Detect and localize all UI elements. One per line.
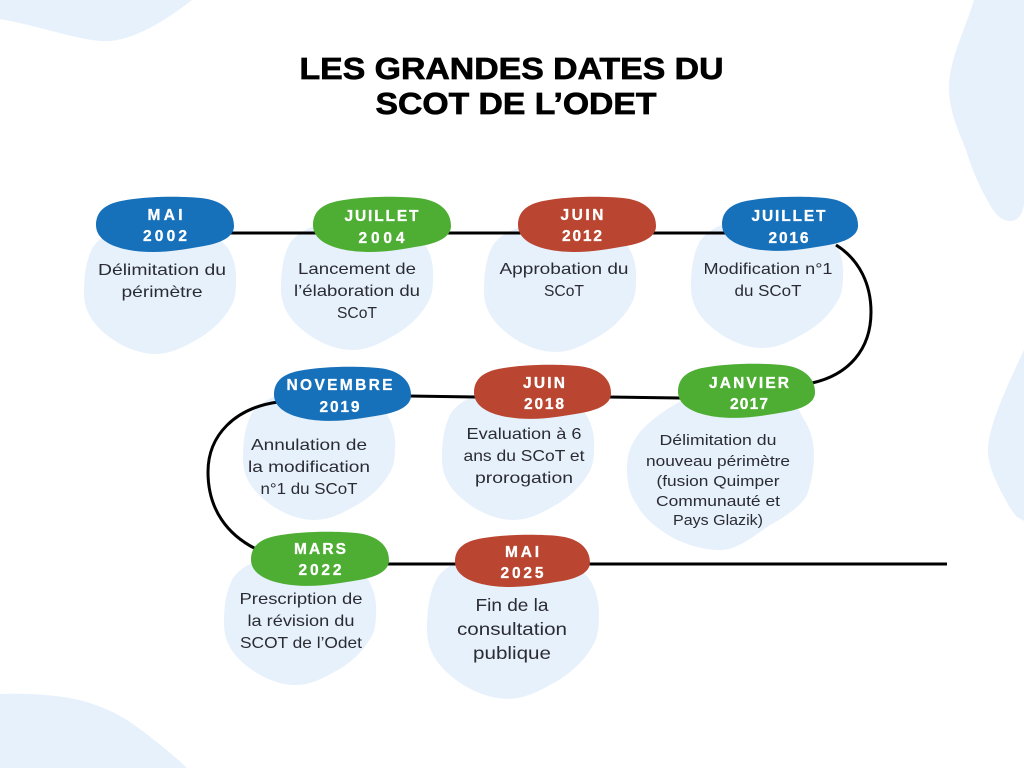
date label: juillet 2004: JUILLET	[344, 208, 419, 225]
event: janvier 2017	[646, 364, 815, 529]
description: juillet 2004	[294, 261, 420, 322]
event: juin 2018	[464, 365, 611, 487]
date label: mars 2022: 2022	[298, 562, 342, 579]
description: mars 2022	[240, 591, 363, 652]
description: mai 2025: Fin de la	[476, 595, 549, 615]
description bubbles	[84, 219, 843, 699]
background shape: top left	[0, 0, 192, 41]
description: janvier 2017: Délimitation du	[660, 433, 776, 449]
date badge: juin 2018	[474, 365, 611, 419]
date label: juillet 2004	[344, 208, 419, 247]
description: juin 2018: prorogation	[475, 470, 573, 487]
date label: mai 2002	[143, 207, 187, 245]
description: novembre 2019: Annulation de	[251, 437, 367, 454]
description: mai 2025: publique	[473, 643, 551, 663]
date label: juin 2012: JUIN	[560, 207, 604, 224]
description: juillet 2004: Lancement de	[298, 261, 416, 278]
description: mai 2002: périmètre	[122, 284, 203, 301]
description bubble: juillet 2016	[691, 219, 843, 348]
date label: mai 2002: 2002	[143, 228, 187, 245]
description: janvier 2017: Communauté et	[656, 494, 780, 510]
date label: juin 2018: JUIN	[523, 375, 565, 392]
background shape: middle right	[988, 350, 1024, 521]
date badge: janvier 2017	[678, 364, 815, 418]
date label: juin 2012	[560, 207, 604, 245]
date label: janvier 2017: JANVIER	[709, 375, 789, 392]
background shape: top right	[949, 0, 1024, 221]
date label: janvier 2017: 2017	[730, 396, 768, 413]
description: juillet 2004: SCoT	[337, 305, 377, 322]
date label: mai 2002: MAI	[148, 207, 182, 224]
description: mai 2025: consultation	[457, 619, 567, 639]
date label: mai 2025	[500, 544, 544, 582]
description bubble: mai 2025	[427, 553, 599, 699]
event: mars 2022	[240, 532, 389, 652]
description bubble: mai 2002	[84, 225, 236, 354]
date label: juin 2018	[523, 375, 565, 413]
description: mars 2022: la révision du	[248, 613, 354, 630]
date label: mars 2022	[294, 541, 346, 579]
description: mars 2022: SCOT de l’Odet	[240, 635, 363, 652]
date label: janvier 2017	[709, 375, 789, 413]
description: mai 2025	[457, 595, 567, 663]
date label: juillet 2004: 2004	[358, 230, 405, 247]
date label: novembre 2019: 2019	[320, 399, 360, 416]
event: mai 2002	[96, 197, 234, 301]
description: juin 2012: SCoT	[544, 283, 584, 300]
date label: mai 2025: MAI	[505, 544, 539, 561]
description: juillet 2004: l’élaboration du	[294, 283, 420, 300]
description: juin 2018: ans du SCoT et	[464, 448, 585, 465]
description: mai 2002: Délimitation du	[98, 262, 226, 279]
description: novembre 2019: n°1 du SCoT	[260, 481, 358, 498]
timeline path	[208, 233, 947, 564]
date label: mai 2025: 2025	[500, 565, 544, 582]
description: juin 2018: Evaluation à 6	[466, 426, 582, 443]
date label: juillet 2016	[752, 208, 826, 247]
date label: juillet 2016: JUILLET	[752, 208, 826, 225]
description: juillet 2016: Modification n°1	[704, 261, 833, 278]
description: janvier 2017	[646, 433, 790, 529]
description: janvier 2017: nouveau périmètre	[646, 454, 790, 470]
description: juillet 2016	[704, 261, 833, 300]
description bubble: janvier 2017	[627, 392, 814, 550]
description: juin 2018	[464, 426, 585, 487]
date badge: novembre 2019	[274, 367, 411, 421]
description bubble: novembre 2019	[243, 391, 395, 520]
event: novembre 2019	[248, 367, 411, 498]
event: juin 2012	[500, 197, 656, 300]
description: mars 2022: Prescription de	[240, 591, 363, 608]
date badge: mars 2022	[251, 532, 389, 586]
description: novembre 2019	[248, 437, 370, 498]
title	[300, 51, 724, 121]
description bubble: mars 2022	[224, 556, 376, 685]
background shape: bottom left	[0, 694, 187, 768]
description: janvier 2017: (fusion Quimper	[656, 474, 780, 490]
event: mai 2025	[455, 535, 590, 663]
date badge: juillet 2016	[722, 197, 858, 251]
description bubble: juin 2018	[442, 391, 594, 520]
date badge: mai 2025	[455, 535, 590, 587]
description: mai 2002	[98, 262, 226, 301]
event: juillet 2016	[704, 197, 858, 300]
date badge: mai 2002	[96, 197, 234, 252]
date badge: juillet 2004	[313, 197, 451, 252]
date label: juillet 2016: 2016	[768, 230, 809, 247]
description bubble: juillet 2004	[281, 221, 433, 350]
description: juin 2012	[500, 261, 628, 300]
description: juillet 2016: du SCoT	[734, 283, 802, 300]
event: juillet 2004	[294, 197, 451, 322]
description: novembre 2019: la modification	[248, 459, 370, 476]
description: janvier 2017: Pays Glazik)	[673, 513, 763, 529]
date label: juin 2012: 2012	[562, 228, 602, 245]
description bubble: juin 2012	[484, 223, 636, 352]
date label: mars 2022: MARS	[294, 541, 346, 558]
description: juin 2012: Approbation du	[500, 261, 628, 278]
date label: novembre 2019	[286, 377, 392, 416]
date badge: juin 2012	[518, 197, 656, 252]
title: SCOT DE L’ODET	[376, 86, 657, 121]
title: LES GRANDES DATES DU	[300, 51, 724, 86]
date label: juin 2018: 2018	[524, 396, 564, 413]
date label: novembre 2019: NOVEMBRE	[286, 377, 392, 394]
